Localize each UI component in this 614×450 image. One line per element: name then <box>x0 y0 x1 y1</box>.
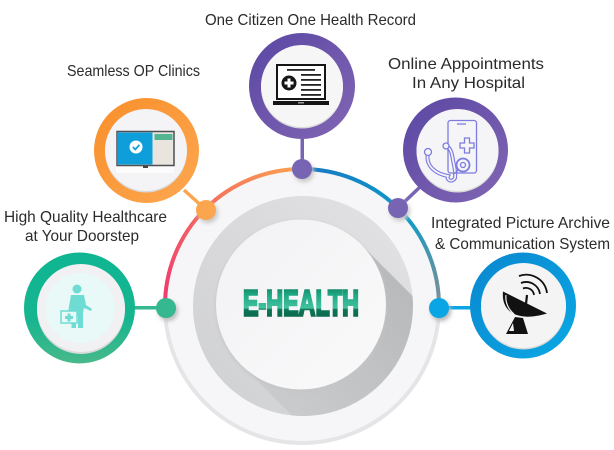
label: Integrated Picture Archive & Communication System: Integrated Picture Archive <box>431 215 610 232</box>
icon: doctor with medical case <box>61 284 92 328</box>
connector: purple top <box>300 137 304 163</box>
ring: purple top <box>249 33 355 139</box>
label: Seamless OP Clinics: Seamless OP Clinics <box>67 63 200 80</box>
label: One Citizen One Health Record: One Citizen One Health Record <box>205 12 416 29</box>
coloured arc: left segment <box>165 169 302 306</box>
label: Online Appointments In Any Hospital: Online Appointments <box>388 56 544 73</box>
node: High Quality Healthcare <box>24 252 178 364</box>
central hub: grey ring with long shadow <box>193 196 413 416</box>
connector: purple right <box>398 187 420 208</box>
label: Integrated Picture Archive & Communication System: & Communication System <box>435 236 610 253</box>
label: Online Appointments In Any Hospital <box>388 56 544 92</box>
central hub: white inner disc <box>216 220 386 391</box>
connector: blue <box>445 306 473 310</box>
coloured arc: right segment <box>302 169 439 306</box>
label: High Quality Healthcare at Your Doorstep: at Your Doorstep <box>25 228 139 245</box>
dot: green <box>156 298 178 321</box>
title: E-HEALTH: E-HEALTH <box>243 282 359 324</box>
node: Online Appointments <box>388 98 508 221</box>
ring: blue <box>470 252 576 358</box>
dot: blue <box>429 298 451 321</box>
icon: laptop with health record <box>273 65 329 105</box>
central hub: outer disc <box>165 169 439 443</box>
node: One Citizen One Health Record <box>249 33 355 182</box>
dot: purple top <box>292 159 314 182</box>
dot: orange <box>196 200 218 223</box>
ring: green <box>24 252 135 364</box>
connector: orange <box>184 190 204 208</box>
label: High Quality Healthcare at Your Doorstep: High Quality Healthcare <box>4 209 167 226</box>
label: Online Appointments In Any Hospital: In Any Hospital <box>412 75 525 92</box>
ring: orange <box>94 98 199 203</box>
icon: smartphone with stethoscope <box>424 120 476 181</box>
node: Integrated Picture Archive <box>429 252 576 358</box>
ring: purple right <box>403 98 508 202</box>
dot: purple right <box>388 198 410 221</box>
icon: satellite dish <box>503 275 547 334</box>
label: Integrated Picture Archive & Communication System <box>431 215 610 253</box>
icon: desktop monitor with check <box>116 131 174 173</box>
label: High Quality Healthcare at Your Doorstep <box>4 209 167 245</box>
node: Seamless OP Clinics <box>94 98 218 223</box>
connector: green <box>134 306 160 310</box>
